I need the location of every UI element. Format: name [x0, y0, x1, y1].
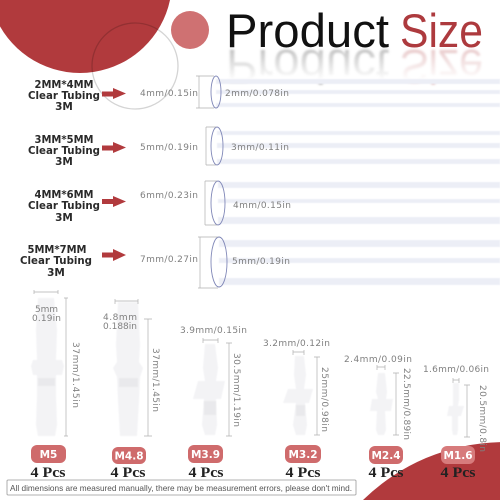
tube 3 label: 4MM*6MM [34, 189, 94, 201]
tube 1 label: Clear Tubing [28, 90, 100, 102]
tube row 2: 3MM*5MM [28, 127, 500, 168]
M1.6 connector [447, 383, 464, 435]
M5 width label [32, 305, 61, 324]
M3.9 quantity: 4 Pcs [188, 465, 224, 481]
tube 1 label: 3M [55, 101, 73, 113]
tube 3 label [28, 189, 100, 224]
M3.9 width line [203, 338, 218, 343]
tube 4 label: 5MM*7MM [28, 244, 86, 256]
tube 3 body [218, 182, 500, 224]
fitting M1.6 [423, 365, 489, 481]
M3.9 tag: M3.9 [191, 449, 220, 461]
M3.9 height label: 30.5mm/1.19in [231, 353, 241, 427]
M1.6 width line [453, 378, 459, 383]
tube 2 label: 3MM*5MM [34, 134, 94, 146]
fitting M3.2 [263, 339, 330, 481]
M5 quantity: 4 Pcs [30, 465, 66, 481]
tube 2 outer dimension line [206, 127, 216, 165]
title [226, 4, 483, 57]
title reflection [220, 40, 490, 93]
M3.2 quantity: 4 Pcs [286, 465, 321, 481]
tube row 4: 5MM*7MM [20, 237, 500, 288]
fitting M5 [30, 290, 80, 481]
tube 2 label [28, 134, 100, 168]
M3.2 tag [285, 445, 321, 463]
M5 connector [31, 298, 64, 436]
tube 3 outer dimension line [205, 181, 217, 225]
M1.6 height label: 20.5mm/0.8in [477, 385, 487, 452]
tube 4 outer size: 7mm/0.27in [140, 255, 198, 265]
tube 1 end ellipse [211, 76, 221, 108]
M4.8 tag: M4.8 [114, 450, 144, 462]
M3.9 tag [188, 445, 223, 463]
fitting M2.4 [344, 355, 412, 481]
tube 4 label [20, 244, 92, 279]
tube 4 arrow [102, 249, 126, 261]
M2.4 quantity: 4 Pcs [368, 465, 404, 481]
measurement disclaimer [7, 480, 356, 495]
tube 1 outer size: 4mm/0.15in [140, 89, 198, 99]
tube 3 arrow [102, 196, 126, 207]
M2.4 width label: 2.4mm/0.09in [344, 355, 412, 365]
tube row 1: 2MM*4MM [28, 76, 500, 113]
tube row 3: 4MM*6MM [28, 181, 500, 225]
tube 1 inner size: 2mm/0.078in [225, 89, 289, 99]
M5 height label: 37mm/1.45in [70, 342, 80, 408]
decoration: large red circle top-left [0, 0, 170, 73]
M5 width label: 0.19in [32, 314, 61, 324]
M4.8 width label [103, 313, 137, 332]
tube 1 arrow [102, 88, 126, 99]
tube 3 inner size: 4mm/0.15in [233, 201, 291, 211]
M4.8 width line [115, 299, 138, 304]
tube 1 label: 2MM*4MM [34, 79, 94, 91]
M1.6 quantity: 4 Pcs [440, 465, 476, 481]
tube 4 end ellipse [211, 237, 227, 287]
tube 4 label: 3M [47, 267, 65, 279]
M2.4 height label: 22.5mm/0.89in [401, 368, 411, 440]
M4.8 width label: 0.188in [103, 322, 137, 332]
title reflection: Product [226, 40, 389, 93]
tube 1 label [28, 79, 100, 113]
M3.2 height line [314, 357, 320, 435]
M3.9 width label: 3.9mm/0.15in [180, 326, 247, 336]
tube 3 end ellipse [211, 181, 225, 225]
M5 height line [64, 298, 68, 436]
M4.8 tag [112, 447, 146, 464]
tube 2 arrow [102, 142, 126, 153]
M3.2 height label: 25mm/0.98in [319, 367, 329, 432]
M4.8 quantity: 4 Pcs [110, 465, 146, 481]
tube 4 label: Clear Tubing [20, 255, 92, 267]
decoration: large red circle bottom-right [363, 442, 500, 500]
M5 tag [31, 445, 66, 463]
tube 2 body [217, 131, 500, 164]
tube 1 outer dimension line [196, 76, 214, 108]
tube 3 outer size: 6mm/0.23in [140, 191, 198, 201]
M1.6 height line [464, 385, 470, 437]
tube 2 outer size: 5mm/0.19in [140, 143, 198, 153]
decoration: pink circle [171, 11, 209, 49]
M4.8 connector [113, 302, 143, 436]
M3.9 height line [226, 343, 232, 436]
M3.2 tag: M3.2 [288, 449, 318, 461]
tube 1 body [216, 79, 500, 107]
M2.4 width line [377, 365, 385, 370]
fitting M4.8 [103, 299, 160, 481]
fitting M3.9 [180, 326, 247, 481]
M2.4 connector [370, 373, 393, 435]
tube 4 outer dimension line [198, 237, 218, 288]
M3.9 connector [193, 344, 225, 435]
title: Product [226, 4, 389, 57]
measurement disclaimer: All dimensions are measured manually, there may be measurement errors, please don't mind. [10, 483, 352, 493]
tube 3 label: 3M [55, 212, 73, 224]
tube 3 label: Clear Tubing [28, 200, 100, 212]
tube 4 inner size: 5mm/0.19in [232, 257, 290, 267]
title reflection: Size [400, 40, 483, 93]
M1.6 width label: 1.6mm/0.06in [423, 365, 489, 375]
M5 width label: 5mm [35, 305, 58, 315]
M4.8 height line [144, 319, 152, 436]
M5 tag: M5 [40, 449, 57, 461]
M3.2 connector [283, 356, 313, 435]
M3.2 width label: 3.2mm/0.12in [263, 339, 330, 349]
M2.4 height line [393, 373, 399, 435]
decoration: thin outline circle [92, 23, 178, 109]
tube 2 label: 3M [55, 156, 73, 168]
M3.2 width line [293, 350, 304, 355]
M1.6 tag: M1.6 [443, 450, 473, 462]
tube 4 body [219, 240, 500, 285]
tube 2 label: Clear Tubing [28, 145, 100, 157]
tube 2 end ellipse [211, 127, 223, 165]
M5 width line [34, 290, 58, 294]
M2.4 tag: M2.4 [371, 450, 401, 462]
title: Size [400, 4, 483, 57]
M4.8 width label: 4.8mm [103, 313, 137, 323]
M4.8 height label: 37mm/1.45in [150, 348, 160, 412]
tube 2 inner size: 3mm/0.11in [231, 143, 289, 153]
